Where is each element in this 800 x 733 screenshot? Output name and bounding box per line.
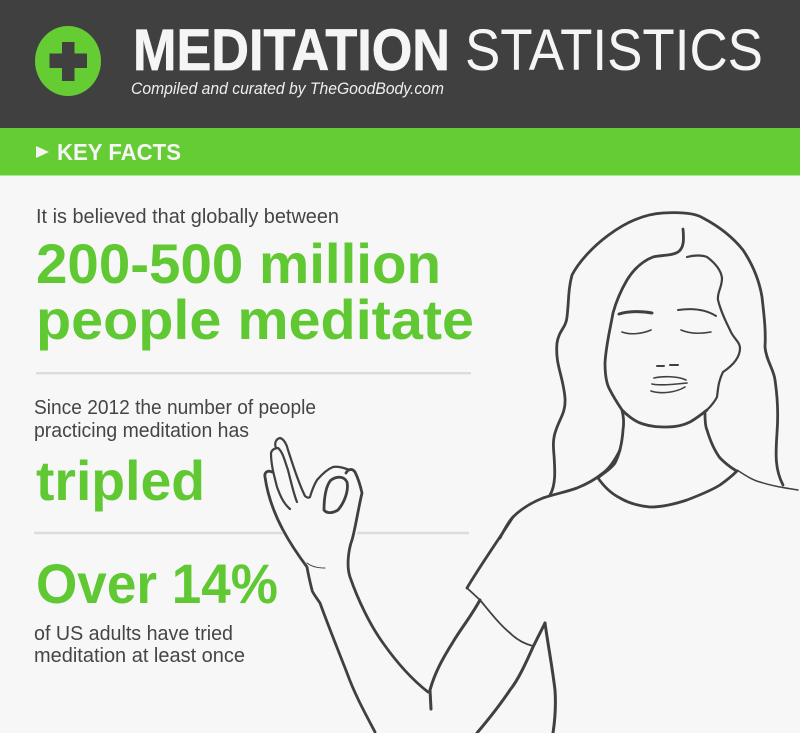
collar [598, 471, 737, 507]
title: MEDITATION [133, 18, 450, 83]
shoulder line [500, 450, 620, 538]
illustration: meditating woman [265, 213, 798, 733]
shoulder to sleeve [467, 517, 513, 588]
divider over hand [34, 532, 469, 534]
fact: global meditators: people meditate [36, 288, 474, 351]
header band [0, 0, 800, 128]
icon: arrow [36, 146, 49, 158]
fact: over 14%: meditation at least once [34, 645, 245, 667]
hair right of face [687, 256, 740, 410]
subtitle: Compiled and curated by TheGoodBody.com [131, 80, 444, 98]
fact: global meditators [36, 206, 474, 351]
hair outer [550, 213, 783, 495]
left neck [598, 410, 624, 478]
fact: tripled [34, 397, 316, 512]
eyes [622, 330, 651, 334]
wrist crease [307, 563, 325, 568]
torso side [545, 623, 555, 733]
title [133, 18, 763, 83]
nose [657, 365, 678, 366]
sleeve edge [467, 588, 533, 646]
upper arm [346, 469, 428, 692]
description: of US adults have tried [34, 623, 233, 645]
hair parting and face left [605, 229, 707, 427]
lower arm and hand [265, 471, 375, 732]
right shoulder [737, 470, 798, 490]
intro text: It is believed that globally between [36, 206, 339, 228]
description: Since 2012 the number of people [34, 397, 316, 419]
fingertip circle [324, 477, 347, 513]
big word: tripled [36, 449, 205, 512]
title: STATISTICS [465, 18, 763, 83]
sleeve lower [477, 623, 545, 733]
inner sleeve [430, 600, 480, 709]
section heading: KEY FACTS [57, 139, 181, 165]
big stat: Over 14% [36, 552, 278, 615]
fact: over 14% [34, 552, 278, 667]
mouth [651, 377, 687, 393]
right neck [705, 413, 735, 470]
section banner: key facts [0, 128, 800, 176]
eyebrows [619, 312, 652, 314]
big stat: 200-500 million [36, 232, 441, 295]
fact: tripled: practicing meditation has [34, 420, 249, 442]
fingers [271, 448, 297, 509]
icon: green circle with plus [35, 26, 101, 96]
